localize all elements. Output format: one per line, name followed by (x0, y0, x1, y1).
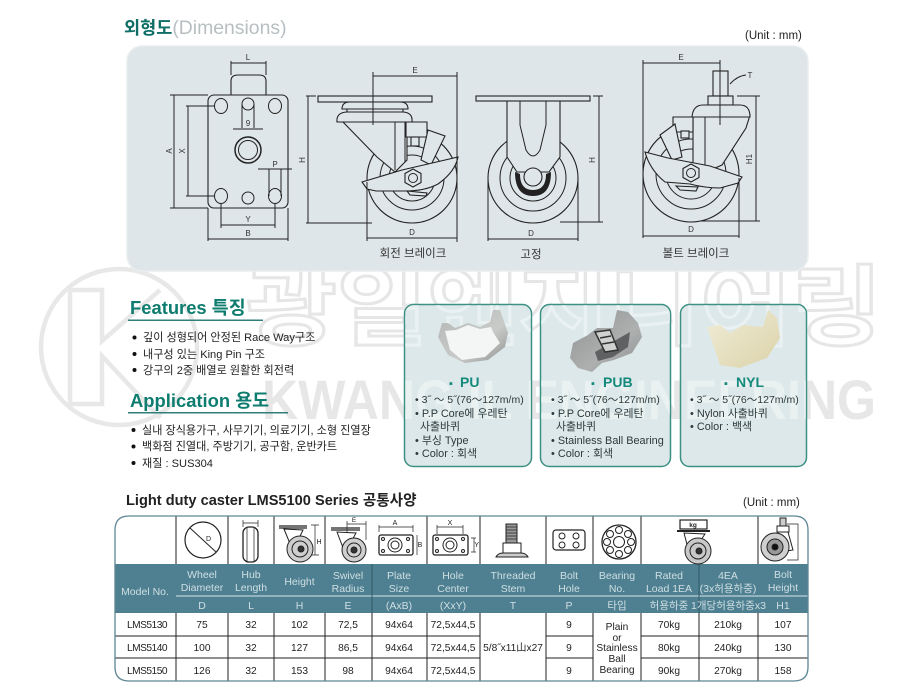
row: LMS5140: 130 (774, 643, 792, 654)
icon: rated load: kg (689, 522, 697, 529)
merged cell: bearing: or (612, 633, 622, 644)
row: LMS5130: 210kg (714, 620, 742, 631)
row: LMS5130: LMS5130 (127, 620, 168, 631)
row: LMS5140: 86,5 (338, 643, 358, 654)
text: PU specs: • 3˝ ～ 5˝(76～127m/m) (415, 394, 524, 406)
row: LMS5150: LMS5150 (127, 666, 168, 677)
icon: hole center (433, 520, 479, 555)
row: LMS5130: 72,5 (338, 620, 358, 631)
row: LMS5150: 9 (566, 666, 572, 677)
text block: features list: 깊이 성형되어 안정된 Race Way구조 (143, 331, 315, 344)
watermark: Korean company name: 광일엔지니어링 (246, 237, 882, 364)
diagram: plate top view: X (178, 148, 187, 154)
merged cell: bearing: Bearing (599, 665, 635, 676)
row: LMS5150: 90kg (658, 666, 680, 677)
icon: wheel diameter: D (206, 536, 211, 543)
diagram: bolt brake caster: T (748, 71, 753, 80)
row: LMS5130: 107 (774, 620, 792, 631)
panel: NYL wheel type (680, 304, 808, 468)
heading: PUB: PUB (603, 374, 633, 390)
panel: dimensions (127, 46, 808, 271)
icon: bearing (602, 525, 636, 559)
label: bolt brake: 볼트 브레이크 (663, 247, 729, 260)
heading: features: Features 특징 (130, 297, 246, 318)
text: NYL specs: • 3˝ ～ 5˝(76～127m/m) (690, 394, 799, 406)
heading: NYL: NYL (736, 374, 764, 390)
row: LMS5150: 158 (774, 666, 792, 677)
diagram: swivel brake caster: D (409, 228, 415, 237)
text: PUB specs: • Color : 회색 (551, 447, 613, 460)
row: LMS5140: 72,5x44,5 (431, 643, 476, 654)
header text: H1 (776, 600, 790, 612)
merged cell: bearing: Ball (608, 654, 626, 665)
header text: Rated (655, 570, 683, 582)
header text: (AxB) (386, 600, 412, 612)
icon: swivel radius (331, 517, 366, 562)
text: NYL specs: • Nylon 사출바퀴 (690, 407, 768, 420)
diagram: bolt brake caster (643, 53, 760, 238)
row: LMS5130: 72,5x44,5 (431, 620, 476, 631)
header text: T (510, 600, 517, 612)
diagram: plate top view: B (245, 229, 251, 238)
row: LMS5130: 94x64 (385, 620, 413, 631)
icon: bolt height (761, 518, 798, 561)
heading: PUB: ▪ (591, 378, 595, 390)
label: swivel brake: 회전 브레이크 (380, 247, 446, 260)
header text: Size (389, 583, 409, 595)
row: LMS5150: 126 (194, 666, 211, 677)
row: LMS5150: 270kg (714, 666, 742, 677)
heading: NYL: ▪ (724, 378, 728, 390)
header text: Center (437, 583, 469, 595)
watermark through PU card (405, 305, 531, 420)
text: PU specs: • P.P Core에 우레탄 (415, 407, 508, 420)
header text: Swivel (333, 570, 363, 582)
icon: plate size (379, 520, 423, 555)
row: LMS5150 (127, 666, 792, 677)
heading: table title: Light duty caster LMS5100 Series 공통사양 (126, 492, 417, 509)
text block: application list: 실내 장식용가구, 사무기기, 의료기기, 소형 진열장 (142, 424, 371, 437)
heading: PU: ▪ (449, 378, 453, 390)
text block: features list: 내구성 있는 King Pin 구조 (143, 348, 265, 361)
row: LMS5130: 102 (291, 620, 308, 631)
icon: wheel diameter (185, 522, 221, 558)
heading: dimensions: 외형도(Dimensions) (124, 17, 287, 39)
header text: Hub (241, 569, 261, 581)
row: LMS5150: 94x64 (385, 666, 413, 677)
row: LMS5150: 98 (342, 666, 354, 677)
diagram: fixed caster: H (588, 157, 597, 163)
row: LMS5150: 153 (291, 666, 308, 677)
diagram: plate top view: A (165, 148, 174, 154)
diagram: swivel brake caster: E (412, 66, 418, 75)
icon: height (279, 525, 322, 562)
header text: Model No. (121, 586, 169, 598)
header text: 4EA (718, 570, 738, 582)
diagram: fixed caster (476, 96, 603, 241)
heading: application: Application 용도 (130, 390, 269, 411)
icon: threaded stem (496, 524, 528, 557)
unit label: table: (Unit : mm) (743, 497, 800, 509)
unit label: dimensions: (Unit : mm) (745, 30, 802, 42)
row: LMS5140: LMS5140 (127, 643, 168, 654)
text: NYL specs: • Color : 백색 (690, 420, 752, 433)
panel: PUB wheel type (540, 304, 672, 468)
diagram: plate top view: 9 (246, 119, 251, 128)
row: LMS5140: 32 (245, 643, 257, 654)
diagram: bolt brake caster: H1 (745, 153, 754, 164)
row: LMS5140: 240kg (714, 643, 742, 654)
row: LMS5130: 32 (245, 620, 257, 631)
icon: swivel radius: E (352, 517, 357, 524)
text block: application list: 백화점 진열대, 주방기기, 공구함, 운반카트 (142, 440, 337, 453)
row: LMS5140: 80kg (658, 643, 680, 654)
watermark through NYL card (681, 305, 806, 419)
icon: hole center: Y (474, 542, 479, 549)
header text: 타입 (607, 599, 627, 612)
row: LMS5140: 94x64 (385, 643, 413, 654)
header text: Bearing (599, 570, 635, 582)
table: specifications (115, 516, 808, 681)
label: fixed: 고정 (520, 248, 542, 261)
diagram: plate top view (165, 53, 292, 241)
row: LMS5130: 75 (196, 620, 208, 631)
text block: application list (132, 424, 371, 470)
header text: Threaded (491, 570, 536, 582)
row: LMS5140: 100 (194, 643, 211, 654)
icon: hub length (243, 520, 258, 562)
image: PUB core (570, 310, 642, 372)
header text: E (344, 600, 352, 612)
table grid (115, 516, 808, 681)
header text: Height (284, 576, 315, 588)
text: PU specs: • Color : 회색 (415, 447, 477, 460)
merged cell: bearing: Plain (606, 622, 628, 633)
icon: plate size: B (418, 542, 423, 549)
icon: bolt hole (553, 530, 585, 550)
header text: Length (235, 582, 267, 594)
header text: (XxY) (440, 600, 466, 612)
header text: Radius (332, 583, 364, 595)
text: PU specs: • 부싱 Type (415, 434, 469, 447)
header text: (3x허용하중) (700, 582, 756, 595)
row: LMS5150: 32 (245, 666, 257, 677)
header text: Hole (558, 583, 580, 595)
header text: Wheel (187, 569, 217, 581)
row: LMS5140: 9 (566, 643, 572, 654)
diagram: bolt brake caster: E (678, 53, 684, 62)
heading: PU: PU (460, 374, 479, 390)
row: LMS5130 (127, 620, 792, 631)
icon: hole center: X (448, 520, 453, 527)
header text: Height (768, 582, 798, 594)
header text: Bolt (774, 569, 792, 581)
diagram: fixed caster: D (528, 229, 534, 238)
header text: H (296, 600, 303, 612)
image: NYL core (707, 310, 780, 368)
merged cell: bearing: Stainless (596, 643, 638, 654)
text: PU specs: 사출바퀴 (420, 420, 460, 433)
diagram: plate top view: L (246, 53, 251, 62)
row: LMS5130: 70kg (658, 620, 680, 631)
diagram: swivel brake caster (298, 66, 458, 242)
header text: Plate (387, 570, 411, 582)
header text: Hole (442, 570, 464, 582)
row: LMS5150: 72,5x44,5 (431, 666, 476, 677)
header text: Load 1EA (646, 583, 692, 595)
header text: Diameter (181, 582, 224, 594)
row: LMS5140: 127 (291, 643, 308, 654)
text block: features list (132, 331, 315, 377)
merged cell: threaded stem: 5/8˝x11山x27 (483, 642, 543, 654)
text: PUB specs: • Stainless Ball Bearing (551, 435, 664, 447)
header text: 허용하중 (650, 599, 689, 612)
header text: 1개당허용하중x3 (691, 599, 766, 612)
icon: height: H (316, 539, 322, 546)
header text: No. (609, 583, 625, 595)
header band (115, 564, 808, 613)
diagram: swivel brake caster: H (298, 157, 307, 163)
text: PUB specs: 사출바퀴 (556, 420, 596, 433)
text: PUB specs: • P.P Core에 우레탄 (551, 407, 644, 420)
watermark: K logo (41, 269, 197, 425)
diagram: bolt brake caster: D (688, 225, 694, 234)
icon: plate size: A (393, 520, 398, 527)
text block: application list: 재질 : SUS304 (142, 457, 213, 470)
diagram: plate top view: P (272, 160, 278, 169)
row: LMS5130: 9 (566, 620, 572, 631)
icon: rated load (677, 520, 711, 564)
header text: P (565, 600, 573, 612)
header text: Stem (501, 583, 526, 595)
text block: features list: 강구의 2중 배열로 원활한 회전력 (143, 363, 294, 377)
header text: Bolt (560, 570, 578, 582)
panel: PU wheel type (404, 304, 532, 468)
header text: D (198, 600, 206, 612)
diagram: plate top view: Y (245, 215, 251, 224)
header text: L (248, 600, 254, 612)
watermark through PUB card (541, 305, 670, 420)
text: PUB specs: • 3˝ ～ 5˝(76～127m/m) (551, 394, 660, 406)
merged cell: bearing (596, 622, 638, 676)
header text (121, 569, 798, 612)
row: LMS5140 (127, 643, 792, 654)
image: PU core (438, 310, 508, 363)
